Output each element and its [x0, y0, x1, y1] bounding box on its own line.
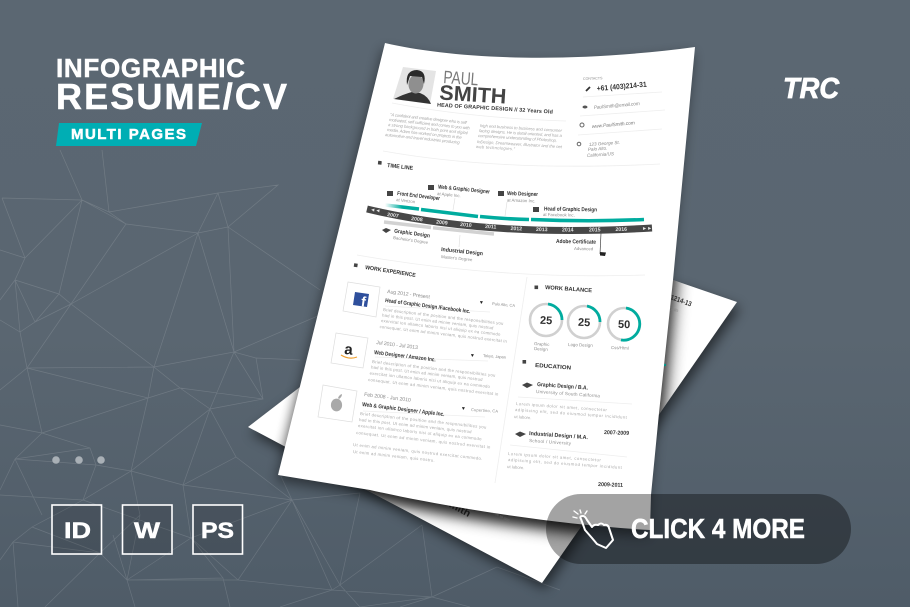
- year labels: 2007: [387, 212, 399, 220]
- header: intro left column: a strong background in both print and digital: [388, 122, 469, 135]
- education entry: industrial design: [507, 431, 623, 489]
- heading: education: [522, 360, 571, 372]
- header: intro right column: web technologies.": [476, 144, 516, 151]
- education entry: graphic design: Graphic Design / B.A.: [537, 382, 589, 392]
- header: intro left column: media. Adam has worked on projects in the: [387, 127, 463, 140]
- icon: Amazon: [341, 341, 357, 359]
- education entry: industrial design: School / University: [529, 438, 572, 446]
- heading: time line: [378, 161, 414, 172]
- logo box: Amazon: [331, 333, 368, 368]
- timeline job labels: at Amazon Inc.: [507, 198, 536, 203]
- education entry: graphic design: Lorem ipsum dolor sit amet, consectetur: [516, 401, 608, 412]
- work entry: Amazon: Brief description of the position and the responsibilities you: [372, 359, 496, 378]
- work entry: Apple: Web & Graphic Designer / Apple Inc.: [362, 402, 445, 418]
- banner: multi pages: MULTI PAGES: [71, 126, 186, 143]
- work entry: Facebook: consequat. Ut enim ad minim veniam, quis nostrud exercitat in: [379, 324, 508, 344]
- back sheet title text: 1214-13: [669, 294, 692, 308]
- back sheet teal dot: [664, 364, 666, 366]
- work entry: Apple: exercitat ion ullamco laboris nisi ut aliquip ex ea commodo: [358, 423, 482, 441]
- work entry: Apple: had in this post. Ut enim ad minim veniam, quis nostrud: [359, 417, 472, 434]
- icon: Apple: [331, 394, 342, 411]
- heading: work balance: WORK BALANCE: [545, 285, 592, 294]
- donut: css/html 50: Css/Html: [611, 345, 629, 351]
- icon: email: [582, 106, 588, 108]
- donut: graphic design 25: [530, 304, 562, 352]
- icon: graduation cap: [522, 382, 533, 388]
- timeline chart: [367, 198, 652, 247]
- education entry: industrial design: ut labore.: [507, 464, 525, 470]
- work entry: Amazon: consequat. Ut enim ad minim veniam, quis nostrud exercitat in: [368, 377, 499, 397]
- donut: logo design 25: 25: [578, 317, 590, 329]
- logo box: Facebook: [343, 282, 380, 317]
- contacts: CONTACTS: [583, 76, 603, 81]
- donut: css/html 50: 50: [618, 319, 630, 331]
- heading: education: EDUCATION: [535, 363, 571, 372]
- paper: [278, 43, 695, 530]
- teal work bars: [385, 205, 419, 209]
- timeline education labels: Adobe Certificate: [556, 239, 596, 246]
- year labels: 2012: [510, 226, 522, 232]
- work entry: Apple: Feb 2008 - Jun 2010: [364, 392, 411, 404]
- badge: PS: [193, 505, 242, 554]
- timeline education labels: Advanced: [574, 246, 594, 251]
- work entry: Apple: Cupertino, CA: [471, 407, 499, 414]
- section dividers: [357, 92, 665, 483]
- icon: Amazon: a: [344, 341, 354, 359]
- header: name: HEAD OF GRAPHIC DESIGN // 32 Years Old: [437, 103, 553, 116]
- icon: briefcase: [498, 191, 504, 196]
- year labels: 2014: [562, 228, 574, 234]
- year labels: 2009: [436, 220, 448, 227]
- back sheet paper: [248, 280, 737, 583]
- year labels: 2008: [411, 216, 423, 223]
- banner: multi pages: [56, 123, 202, 146]
- work entry: Facebook: Palo Alto, CA: [492, 301, 516, 308]
- icon: graduation cap: [515, 432, 526, 437]
- dark year bar: [367, 209, 652, 231]
- work entry: Facebook: Brief description of the position and the responsibilities you: [383, 307, 504, 326]
- work entry: Amazon: had in this post. Ut enim ad minim veniam, quis nostrud: [371, 365, 483, 382]
- work entry: Facebook: exercitat ion ullamco laboris nisi ut aliquip ex ea commodo: [381, 318, 501, 337]
- logo: TRC: TRC: [783, 73, 840, 105]
- donut: logo design 25: [568, 306, 600, 348]
- work entry: Apple: consequat. Ut enim ad minim veniam, quis nostrud exercitat in: [356, 430, 491, 450]
- work entry: Facebook: Aug 2012 - Present: [387, 289, 431, 301]
- contacts: [577, 76, 647, 158]
- heading: work experience: [354, 263, 416, 279]
- header: intro right column: [476, 123, 563, 151]
- title line 2: RESUME/CV: [56, 76, 287, 117]
- education entry: graphic design: adipiscing elit, sed do eiusmod tempor incididunt: [515, 407, 628, 420]
- header: intro left column: motivated, self sufficient and comes to you with: [389, 117, 471, 131]
- title line 1: INFOGRAPHIC: [56, 53, 245, 83]
- work entry: Amazon: Tokyo, Japan: [483, 353, 506, 360]
- work entry: Amazon: [331, 333, 506, 397]
- heading: work experience: WORK EXPERIENCE: [365, 265, 416, 279]
- connector lines: [453, 198, 507, 247]
- work entry: Apple: Ut enim ad minim veniam, quis nostrud exercitat commodo.: [353, 442, 483, 461]
- pagination dots: [52, 456, 105, 464]
- heading: time line: TIME LINE: [387, 163, 414, 172]
- front sheet shadow: [276, 49, 693, 536]
- icon: location: [577, 142, 581, 146]
- donut: graphic design 25: Design: [534, 346, 548, 352]
- timeline education labels: [382, 228, 606, 262]
- education entry: graphic design: [514, 382, 629, 437]
- education entry: industrial design: Industrial Design / M.A.: [529, 431, 589, 441]
- timeline job labels: Front End Developer: [397, 191, 441, 202]
- donut: css/html 50: [608, 308, 640, 351]
- donut: graphic design 25: Graphic: [534, 341, 550, 347]
- header: intro left column: "A confident and creative designer who is self: [390, 112, 468, 125]
- contacts: www.PaulSmith.com: [592, 120, 635, 130]
- work entry: Amazon: Web Designer / Amazon Inc.: [374, 350, 436, 364]
- badge: W: [122, 505, 172, 554]
- header: intro right column: high end business to business and consumer: [480, 123, 563, 133]
- timeline job labels: at Facebook Inc.: [543, 212, 575, 218]
- background polygon network: [0, 150, 560, 607]
- header: name: [437, 67, 553, 116]
- donut: graphic design 25: 25: [540, 315, 552, 327]
- work entry: Amazon: exercitat ion ullamco laboris nisi ut aliquip ex ea commodo: [369, 371, 491, 389]
- back sheet shadow: [251, 286, 740, 589]
- back sheet small label: Skills: [669, 306, 679, 313]
- work entry: Facebook: had in this post. Ut enim ad minim veniam, quis nostrud: [382, 313, 494, 330]
- contacts: +61 (403)214-31: [596, 80, 647, 93]
- badge: ID: [52, 505, 102, 554]
- icon: briefcase: [428, 185, 434, 190]
- header: intro left column: [385, 112, 471, 145]
- grey education bars: [384, 222, 431, 228]
- year labels: [370, 207, 652, 234]
- badge: W: W: [134, 518, 160, 543]
- year labels: 2013: [536, 227, 548, 233]
- work entry: Facebook: [343, 282, 516, 344]
- header: photo: [393, 67, 436, 104]
- header: intro right column: comprehensive understanding of Photoshop,: [478, 133, 557, 143]
- title block: [56, 53, 287, 146]
- icon: graduation cap: [382, 228, 391, 233]
- year labels: 2011: [485, 224, 497, 231]
- back sheet caption: and close to see: [483, 505, 512, 523]
- icon: Facebook: f: [360, 293, 367, 310]
- icon: briefcase: [387, 191, 393, 196]
- timeline job labels: Web & Graphic Designer: [438, 185, 491, 196]
- back sheet dark name: Smith: [441, 496, 472, 520]
- education entry: industrial design: Lorem ipsum dolor sit amet, consectetur: [508, 451, 602, 463]
- logo box: Apple: [318, 385, 357, 422]
- work entry: Apple: Brief description of the position and the responsibilities you: [360, 411, 487, 430]
- timeline education labels: Graphic Design: [394, 229, 431, 240]
- header: intro right column: InDesign, Dreamweaver, Illustrator and the net: [477, 139, 563, 149]
- timeline education labels: Bachelor's Degree: [393, 235, 429, 245]
- timeline job labels: Head of Graphic Design: [544, 207, 598, 213]
- header: name: PAUL: [443, 67, 479, 89]
- year labels: ◄◄: [370, 207, 381, 214]
- icon: flag: [600, 233, 601, 254]
- timeline education labels: Industrial Design: [441, 247, 484, 257]
- back sheet: [248, 280, 742, 592]
- contacts: California/US: [587, 151, 615, 158]
- education entry: industrial design: adipiscing elit, sed do eiusmod tempor incididunt: [508, 457, 623, 470]
- contacts: 123 George St.: [589, 140, 620, 147]
- front sheet: resume: [278, 43, 695, 530]
- icon: Facebook: [353, 292, 369, 310]
- header: name: SMITH: [439, 82, 507, 109]
- timeline job labels: at Apple Inc.: [437, 191, 461, 198]
- work entry: Apple: Ut enim ad minim veniam, quis nostru.: [353, 449, 435, 463]
- year labels: 2016: [615, 227, 627, 233]
- shade cast by front sheet: [279, 280, 690, 543]
- education entry: graphic design: 2007-2009: [604, 430, 629, 437]
- icon: pointing hand: [573, 510, 613, 548]
- button label: CLICK 4 MORE: [631, 513, 805, 544]
- year labels: 2015: [589, 228, 601, 234]
- timeline job labels: Web Designer: [507, 191, 539, 198]
- education entry: industrial design: 2009-2011: [598, 482, 623, 489]
- timeline education labels: Master's Degree: [441, 254, 473, 262]
- badge: ID: ID: [64, 518, 91, 543]
- timeline job labels: at Verizon: [396, 197, 416, 204]
- work entry: Facebook: Head of Graphic Design /Facebook Inc.: [385, 298, 471, 315]
- education entry: graphic design: ut labore.: [514, 414, 532, 420]
- icon: phone: [586, 87, 590, 91]
- contacts: Palo Alto.: [588, 146, 608, 152]
- icon: briefcase: [533, 207, 539, 212]
- work entry: Amazon: Jul 2010 - Jul 2013: [376, 340, 418, 351]
- header: intro left column: automotive and travel industries producing: [385, 132, 461, 145]
- button: click 4 more: [546, 494, 851, 564]
- header: intro right column: facing designs. He is detail oriented, and has a: [479, 128, 563, 138]
- donut: logo design 25: Logo Design: [568, 342, 593, 348]
- contacts: PaulSmith@email.com: [594, 101, 640, 111]
- work entry: Apple: [318, 385, 499, 463]
- badge: PS: PS: [201, 518, 234, 543]
- icon: web: [580, 123, 584, 127]
- year labels: ►►: [642, 226, 652, 232]
- timeline job labels: [387, 185, 598, 218]
- year labels: 2010: [460, 222, 472, 229]
- education entry: graphic design: University of South California: [536, 389, 601, 398]
